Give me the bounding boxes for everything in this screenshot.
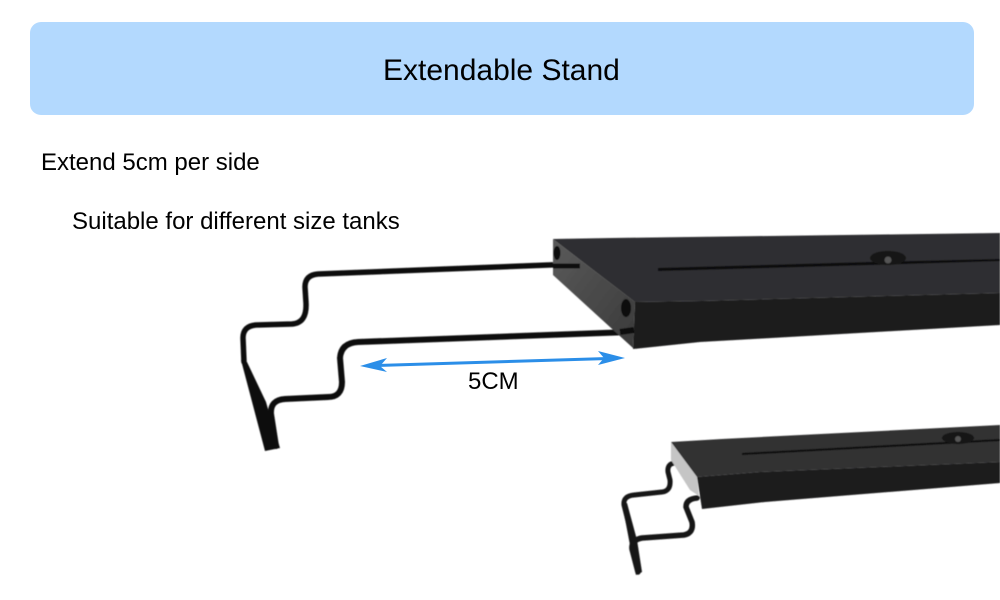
large bracket top bbox=[553, 233, 1000, 302]
large bracket front bbox=[633, 293, 1000, 349]
text: extend per side: Extend 5cm per side bbox=[41, 149, 260, 176]
large bracket slider knob bbox=[870, 251, 906, 265]
large wire arm bbox=[243, 264, 630, 446]
small wire end plate bbox=[622, 503, 642, 575]
text: suitable for tanks: Suitable for different size tanks bbox=[72, 208, 400, 235]
small stand bbox=[622, 425, 1000, 575]
small bracket top bbox=[671, 425, 1000, 477]
large wire end plate bbox=[241, 360, 280, 451]
small bracket end face bbox=[671, 442, 699, 496]
small wire arm bbox=[624, 463, 697, 572]
large stand bbox=[241, 233, 1000, 451]
title: Extendable Stand bbox=[383, 54, 620, 87]
double arrow: 5cm span bbox=[360, 351, 625, 372]
large bracket end face bbox=[553, 239, 635, 348]
small bracket front bbox=[697, 462, 1000, 509]
large bracket slot bbox=[658, 259, 1000, 271]
title banner bbox=[30, 22, 974, 115]
small bracket slot bbox=[742, 439, 1000, 455]
small bracket slider knob bbox=[942, 432, 974, 444]
label: 5CM: 5CM bbox=[468, 368, 519, 395]
large bracket holes bbox=[554, 246, 560, 260]
